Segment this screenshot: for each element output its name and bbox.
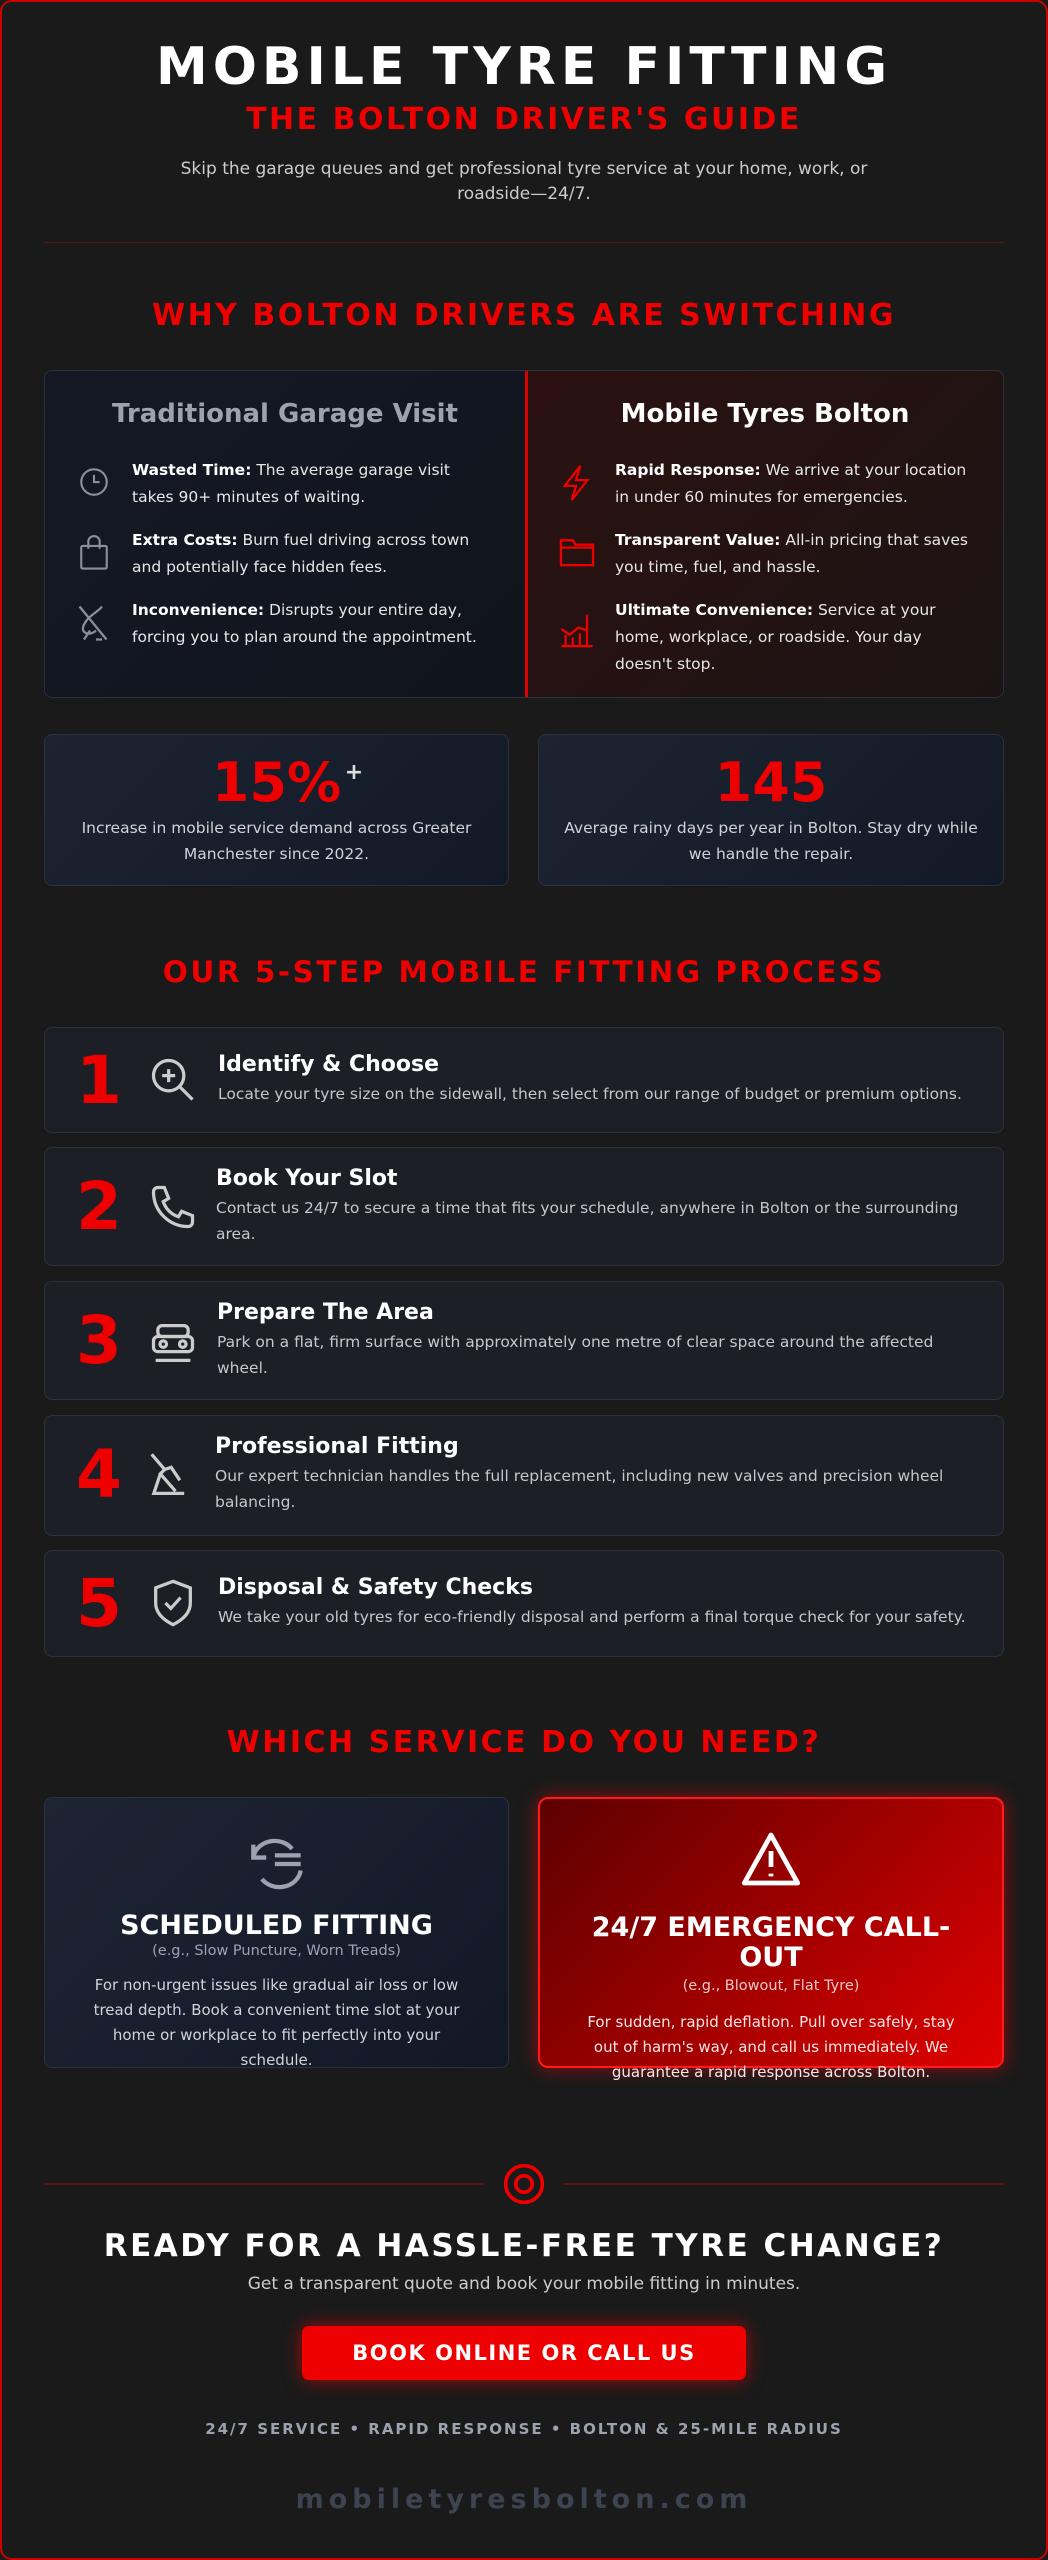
- icon: warning: [742, 1832, 800, 1886]
- card: scheduled fitting: [44, 1797, 509, 2068]
- step 1: Identify & Choose: [218, 1052, 439, 1077]
- panel: comparison: [44, 370, 1004, 698]
- icon: target: [504, 2164, 544, 2204]
- item: wasted time: Wasted Time: The average garage visit takes 90+ minutes of waiting.: [132, 461, 450, 506]
- cta subtext: Get a transparent quote and book your mobile fitting in minutes.: [248, 2274, 800, 2294]
- heading: ready: READY FOR A HASSLE-FREE TYRE CHANGE?: [104, 2228, 944, 2264]
- heading: why switching: WHY BOLTON DRIVERS ARE SWITCHING: [152, 298, 896, 333]
- icon: car: [152, 1324, 194, 1362]
- tags: 24/7 SERVICE • RAPID RESPONSE • BOLTON & 25-MILE RADIUS: [205, 2420, 843, 2438]
- tagline: Skip the garage queues and get professional tyre service at your home, work, or roadside—24/7.: [181, 159, 867, 204]
- step 4: 4: [76, 1436, 122, 1513]
- icon: clock: [80, 468, 108, 496]
- icon: phone: [152, 1186, 194, 1228]
- icon: tool: [150, 1453, 184, 1495]
- step 3: [44, 1281, 1004, 1400]
- icon: broken: [78, 606, 108, 641]
- subtitle: THE BOLTON DRIVER'S GUIDE: [246, 102, 802, 137]
- step 2: 2: [76, 1168, 122, 1245]
- step 4: Professional Fitting: [215, 1434, 459, 1459]
- item: ultimate convenience: Ultimate Convenience: Service at your home, workplace, or roadside. Your day doesn't stop.: [615, 601, 936, 673]
- card: scheduled fitting: SCHEDULED FITTING: [120, 1910, 433, 1941]
- step 1: Locate your tyre size on the sidewall, then select from our range of budget or premium options.: [218, 1085, 962, 1103]
- icon: shield: [154, 1580, 192, 1626]
- panel: traditional garage: [45, 371, 525, 699]
- step 5: Disposal & Safety Checks: [218, 1575, 533, 1600]
- icon: bag: [80, 535, 108, 570]
- icon: bolt: [562, 465, 590, 501]
- icon: folder: [560, 539, 594, 566]
- item: transparent value: Transparent Value: All-in pricing that saves you time, fuel, and hassle.: [615, 531, 968, 576]
- step 4: [44, 1415, 1004, 1536]
- card: emergency: OUT: [739, 1942, 803, 1973]
- stat card: 145: Average rainy days per year in Bolton. Stay dry while we handle the repair.: [564, 819, 978, 863]
- step 2: Book Your Slot: [216, 1166, 398, 1191]
- step 3: Prepare The Area: [217, 1300, 434, 1325]
- card: emergency: [538, 1797, 1004, 2068]
- step 1: [44, 1027, 1004, 1133]
- stat card: 15%: [44, 734, 509, 886]
- step 5: [44, 1550, 1004, 1657]
- card: scheduled fitting: (e.g., Slow Puncture, Worn Treads): [152, 1943, 401, 1959]
- stat card: 145: [538, 734, 1004, 886]
- title: MOBILE TYRE FITTING: [156, 37, 892, 97]
- step 2: [44, 1147, 1004, 1266]
- heading: mobile: Mobile Tyres Bolton: [621, 399, 909, 429]
- card: scheduled fitting: For non-urgent issues like gradual air loss or low tread depth. Book a convenient time slot at your home or workplace to fit perfectly into your schedule.: [94, 1976, 459, 2069]
- icon: zoom: [152, 1058, 194, 1101]
- heading: process: OUR 5-STEP MOBILE FITTING PROCESS: [163, 955, 885, 989]
- stat card: 15%: Increase in mobile service demand across Greater Manchester since 2022.: [82, 819, 471, 863]
- button: [302, 2326, 746, 2380]
- step 5: 5: [76, 1565, 122, 1642]
- heading: which service: WHICH SERVICE DO YOU NEED?: [227, 1725, 821, 1760]
- icon: cycle: [251, 1838, 303, 1890]
- card: emergency: (e.g., Blowout, Flat Tyre): [683, 1978, 859, 1994]
- step 1: 1: [76, 1042, 122, 1119]
- step 5: We take your old tyres for eco-friendly disposal and perform a final torque check for your safety.: [218, 1608, 966, 1626]
- item: extra costs: Extra Costs: Burn fuel driving across town and potentially face hidden fees.: [132, 531, 469, 576]
- stat card: 15%: 15%: [212, 751, 341, 814]
- url: mobiletyresbolton.com: [296, 2484, 752, 2515]
- heading: traditional: Traditional Garage Visit: [112, 399, 458, 429]
- item: rapid response: Rapid Response: We arrive at your location in under 60 minutes for emergencies.: [615, 461, 966, 506]
- panel: mobile tyres: [525, 371, 1005, 699]
- stat card: 145: 145: [715, 751, 827, 814]
- step 2: Contact us 24/7 to secure a time that fits your schedule, anywhere in Bolton or the surrounding area.: [216, 1199, 958, 1243]
- stat card: 15%: +: [345, 760, 363, 785]
- step 3: 3: [76, 1302, 122, 1379]
- card: emergency: 24/7 EMERGENCY CALL-: [592, 1912, 950, 1943]
- step 4: Our expert technician handles the full replacement, including new valves and precision wheel balancing.: [215, 1467, 943, 1511]
- icon: chart: [560, 614, 593, 648]
- item: inconvenience: Inconvenience: Disrupts your entire day, forcing you to plan around the appointment.: [132, 601, 477, 646]
- card: emergency: For sudden, rapid deflation. Pull over safely, stay out of harm's way, and call us immediately. We guarantee a rapid response across Bolton.: [587, 2013, 955, 2081]
- step 3: Park on a flat, firm surface with approximately one metre of clear space around the affected wheel.: [217, 1333, 933, 1377]
- button: BOOK ONLINE OR CALL US: [352, 2341, 696, 2365]
